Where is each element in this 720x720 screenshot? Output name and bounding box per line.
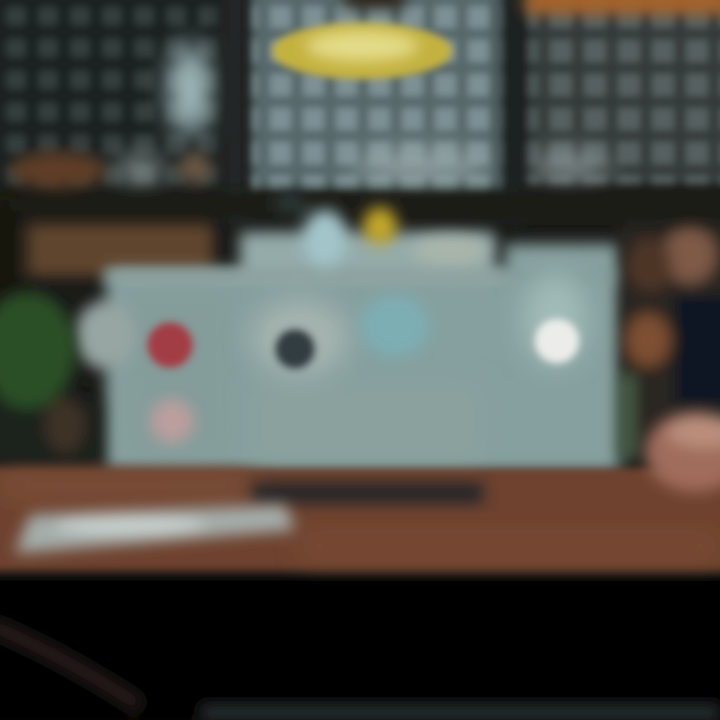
right window xyxy=(525,0,720,185)
left window xyxy=(0,0,225,190)
laptop base xyxy=(252,482,484,504)
icon: dark circle xyxy=(252,300,348,376)
icon: white circle xyxy=(523,274,587,366)
desk xyxy=(0,468,720,570)
left white bubble xyxy=(75,301,135,369)
icon: pink circle xyxy=(150,399,194,443)
window glare highlights xyxy=(116,44,610,184)
window pillars xyxy=(222,0,526,225)
hand xyxy=(645,412,720,492)
laptop screen xyxy=(106,232,620,472)
icon: red circle xyxy=(147,322,193,368)
window grid panes xyxy=(0,0,720,190)
centre window xyxy=(250,0,505,190)
dark lamp fitting xyxy=(345,0,405,8)
shelf objects xyxy=(0,152,213,300)
icon: teal circle xyxy=(361,296,429,356)
shelf band xyxy=(0,192,720,218)
foreground dark dashboard xyxy=(0,578,720,720)
foreground tan curve xyxy=(0,625,140,706)
orange light top right xyxy=(525,0,720,14)
foreground bottom light strip xyxy=(200,704,720,720)
person silhouette xyxy=(618,225,720,460)
screen top icons xyxy=(274,191,488,266)
papers on desk xyxy=(15,505,295,553)
plant xyxy=(0,292,100,465)
pendant lamp xyxy=(272,23,452,79)
